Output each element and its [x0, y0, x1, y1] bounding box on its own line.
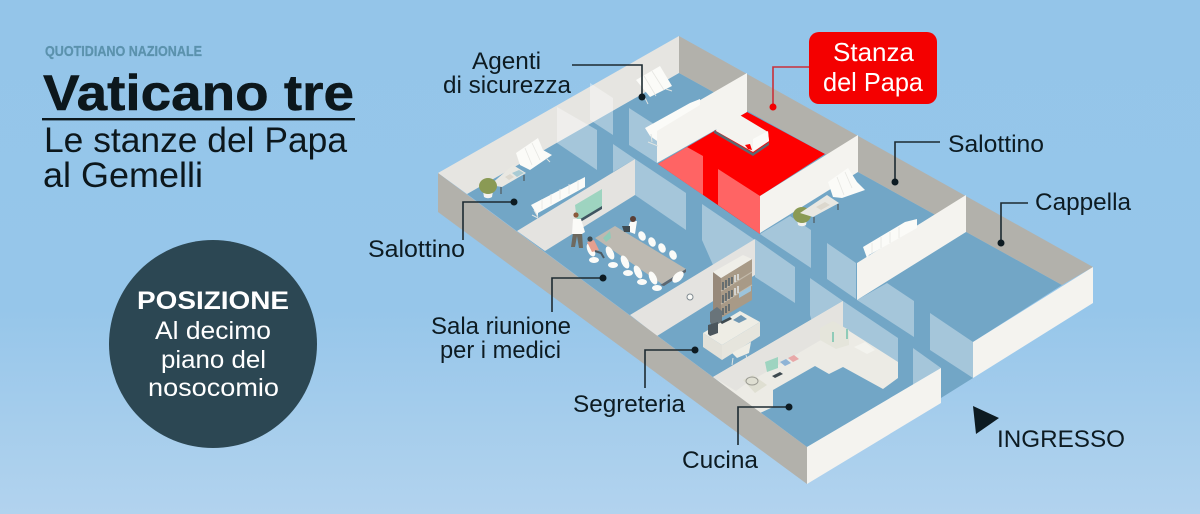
- icon: bench salottino: [863, 219, 917, 258]
- glass panels on rear wall: [557, 83, 657, 172]
- callout: posizione: nosocomio: [148, 374, 279, 402]
- icon: bench left room: [516, 138, 552, 170]
- icon: plant left room: [479, 178, 497, 198]
- icon: table left room: [490, 165, 526, 194]
- glass panels in corridor: [635, 159, 973, 385]
- subtitle: al Gemelli: [43, 156, 203, 195]
- wall: outer front right: [973, 267, 1093, 378]
- subtitle: [43, 121, 348, 195]
- subtitle: Le stanze del Papa: [44, 121, 348, 160]
- label: cappella: Cappella: [1035, 189, 1132, 216]
- icon: office chair: [710, 307, 722, 326]
- floor plan: [438, 36, 1093, 484]
- label: cucina: Cucina: [682, 447, 759, 474]
- figure: seated person: [587, 236, 604, 258]
- icon: plant corridor: [793, 207, 811, 226]
- figure: seated doctor: [622, 216, 637, 234]
- publisher label: QUOTIDIANO NAZIONALE: [45, 43, 202, 60]
- label: stanza del Papa: del Papa: [823, 67, 924, 97]
- wall: office: [630, 239, 755, 336]
- label: segreteria: Segreteria: [573, 391, 686, 418]
- label: stanza del Papa: Stanza: [833, 37, 915, 67]
- label: stanza del Papa: [770, 32, 937, 110]
- label: agenti di sicurezza: di sicurezza: [443, 72, 572, 99]
- icon: visitor chair: [732, 342, 751, 365]
- label: salottino left: Salottino: [368, 236, 465, 263]
- wall: outer front kitchen: [807, 368, 941, 484]
- icon: bed: [714, 110, 769, 156]
- icon: bench meeting wall: [531, 177, 585, 218]
- rear left wall: [438, 36, 679, 194]
- back wall: [679, 36, 1093, 285]
- label: cucina: [682, 404, 792, 474]
- label: salottino right: [892, 131, 1044, 186]
- label: agenti di sicurezza: [443, 48, 646, 100]
- label: salottino right: Salottino: [948, 131, 1044, 158]
- wall: outer left: [438, 173, 807, 484]
- label: ingresso: INGRESSO: [997, 426, 1125, 453]
- wall: stanza right: [760, 135, 858, 233]
- icon: kitchen screen: [765, 355, 799, 378]
- label: sala riunione: per i medici: [440, 337, 561, 364]
- meeting table: [595, 226, 686, 284]
- wall: meeting room: [517, 159, 635, 251]
- title: Vaticano tre: [43, 65, 354, 121]
- chairs: [585, 230, 686, 291]
- icon: fridge: [820, 321, 849, 349]
- wall: salottino right: [857, 195, 966, 300]
- red room: stanza del Papa: [658, 112, 825, 234]
- label: cappella: [998, 189, 1132, 246]
- label: sala riunione: [431, 274, 606, 364]
- label: segreteria: [573, 346, 698, 418]
- callout: posizione: [109, 240, 317, 448]
- figure: doctor standing: [571, 212, 585, 248]
- icon: table corridor: [800, 195, 839, 223]
- wall: stanza left: [657, 73, 747, 163]
- label: sala riunione: Sala riunione: [431, 313, 571, 340]
- callout: posizione: piano del: [161, 346, 266, 374]
- floor: [467, 73, 1062, 447]
- label: agenti di sicurezza: Agenti: [472, 48, 541, 75]
- icon: scale: [743, 375, 767, 393]
- icon: bookcase: [713, 255, 752, 318]
- label: salottino left: [368, 198, 518, 263]
- bench beside stanza wall: [645, 99, 700, 146]
- icon: whiteboard: [575, 189, 602, 224]
- icon: bench agenti: [636, 66, 672, 104]
- callout: posizione: Al decimo: [155, 317, 271, 345]
- kitchen: [713, 301, 898, 413]
- callout: posizione: POSIZIONE: [137, 287, 289, 315]
- icon: wall clock: [687, 294, 693, 300]
- arrow: ingresso: [973, 406, 999, 434]
- icon: laptop: [603, 231, 611, 242]
- icon: desk: [703, 311, 760, 360]
- icon: bench corridor: [828, 168, 865, 198]
- icon: sink: [854, 342, 875, 354]
